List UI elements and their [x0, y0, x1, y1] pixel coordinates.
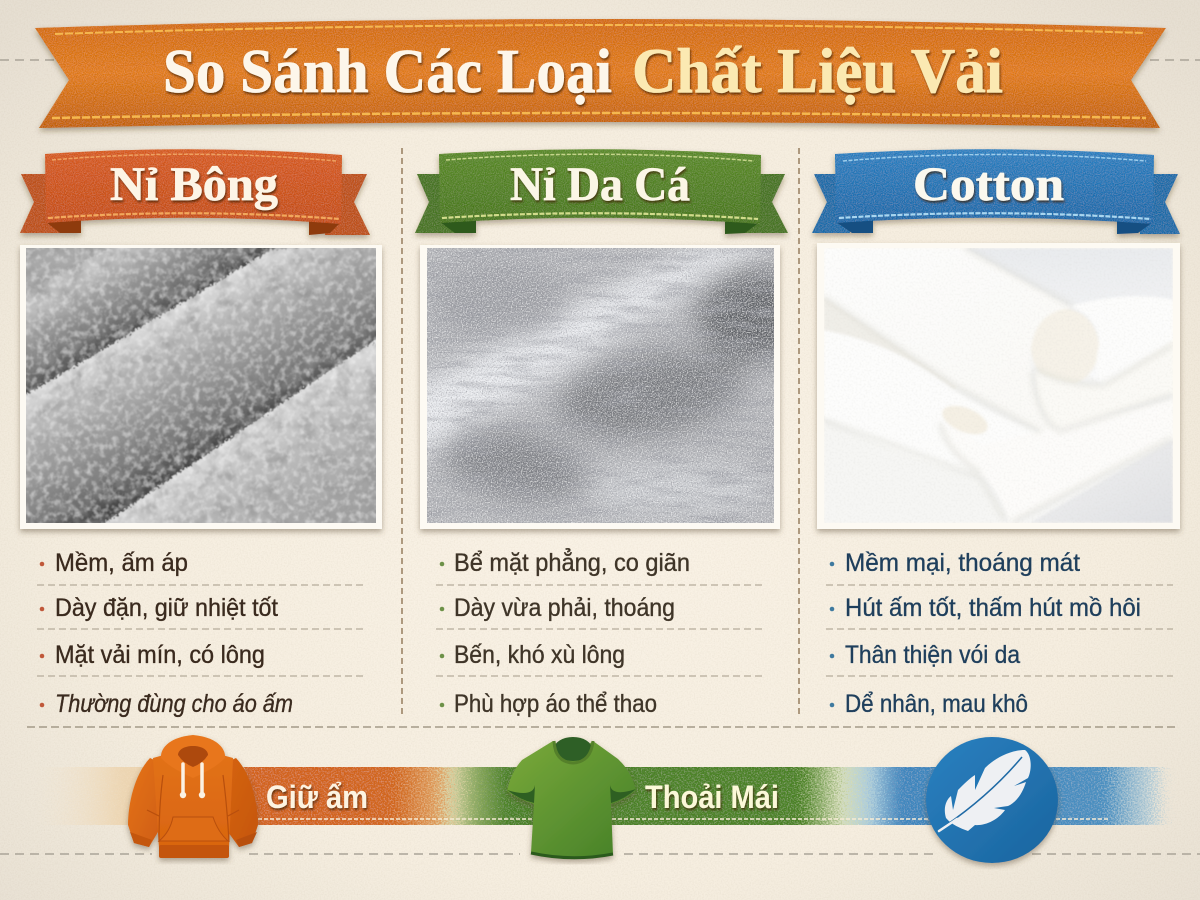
icon: orange hoodie [128, 735, 258, 858]
separators [436, 585, 764, 676]
ribbon label: Nỉ Bông [110, 158, 278, 211]
photo: french terry fabric [416, 244, 784, 536]
column dividers [402, 148, 799, 717]
cotton folds [824, 248, 1173, 523]
photo frame [420, 245, 780, 529]
terry surface [427, 248, 774, 523]
bullets [440, 562, 444, 707]
list: Nỉ Da Cá properties [436, 547, 764, 718]
item text: Dày đặn, giữ nhiệt tốt [55, 594, 278, 622]
photo: cotton fabric [817, 243, 1180, 529]
ribbon: Nỉ Bông [20, 149, 370, 235]
band stitching [258, 818, 1110, 820]
bullets [40, 562, 44, 707]
item text [845, 549, 1141, 718]
ribbon tails [20, 149, 370, 235]
photo frame [20, 245, 382, 529]
title ribbon shape [35, 19, 1166, 128]
bullets [830, 562, 834, 707]
item text: Thân thiện vói da [845, 641, 1020, 669]
title highlight text: Chất Liệu Vải [632, 35, 1003, 106]
separators [37, 585, 364, 676]
photo: fleece fabric [16, 238, 386, 533]
item text: Dày vừa phải, thoáng [454, 594, 675, 622]
item text: Mặt vải mín, có lông [55, 641, 265, 669]
bottom benefit band [62, 767, 1178, 825]
icon: blue feather badge [926, 737, 1058, 863]
photo frame [817, 243, 1180, 529]
list: Nỉ Bông properties [37, 549, 364, 718]
feather [939, 750, 1031, 831]
bottom separator [27, 726, 1175, 728]
item text: Mềm mại, thoáng mát [845, 549, 1080, 577]
badge disc [926, 737, 1058, 863]
item text [454, 547, 690, 718]
ribbon label: Nỉ Da Cá [510, 158, 690, 211]
separators [826, 585, 1173, 676]
label: Giữ ẩm: Giữ ẩm [266, 779, 368, 815]
list: Cotton properties [826, 549, 1173, 718]
item text [55, 549, 293, 718]
item text: Dể nhân, mau khô [845, 690, 1028, 718]
ribbon: Cotton [812, 149, 1180, 234]
ribbon label: Cotton [913, 158, 1064, 211]
ribbon: Nỉ Da Cá [415, 149, 788, 234]
item text: Bến, khó xù lông [454, 641, 625, 669]
icon: green t-shirt [507, 737, 636, 858]
title banner [35, 19, 1166, 128]
ribbon tails [415, 149, 788, 234]
item text: Mềm, ấm áp [55, 549, 188, 577]
item text: Hút ấm tốt, thấm hút mồ hôi [845, 594, 1141, 622]
gradient band [62, 767, 1178, 825]
label: Thoải Mái: Thoải Mái [645, 779, 779, 815]
item text: Thường đùng cho áo ấm [55, 690, 293, 718]
ribbon tails [812, 149, 1180, 234]
title text: So Sánh Các Loại [163, 38, 612, 106]
fleece folds [26, 248, 376, 523]
item text: Bể mặt phẳng, co giãn [454, 547, 690, 577]
item text: Phù hợp áo thể thao [454, 690, 657, 718]
